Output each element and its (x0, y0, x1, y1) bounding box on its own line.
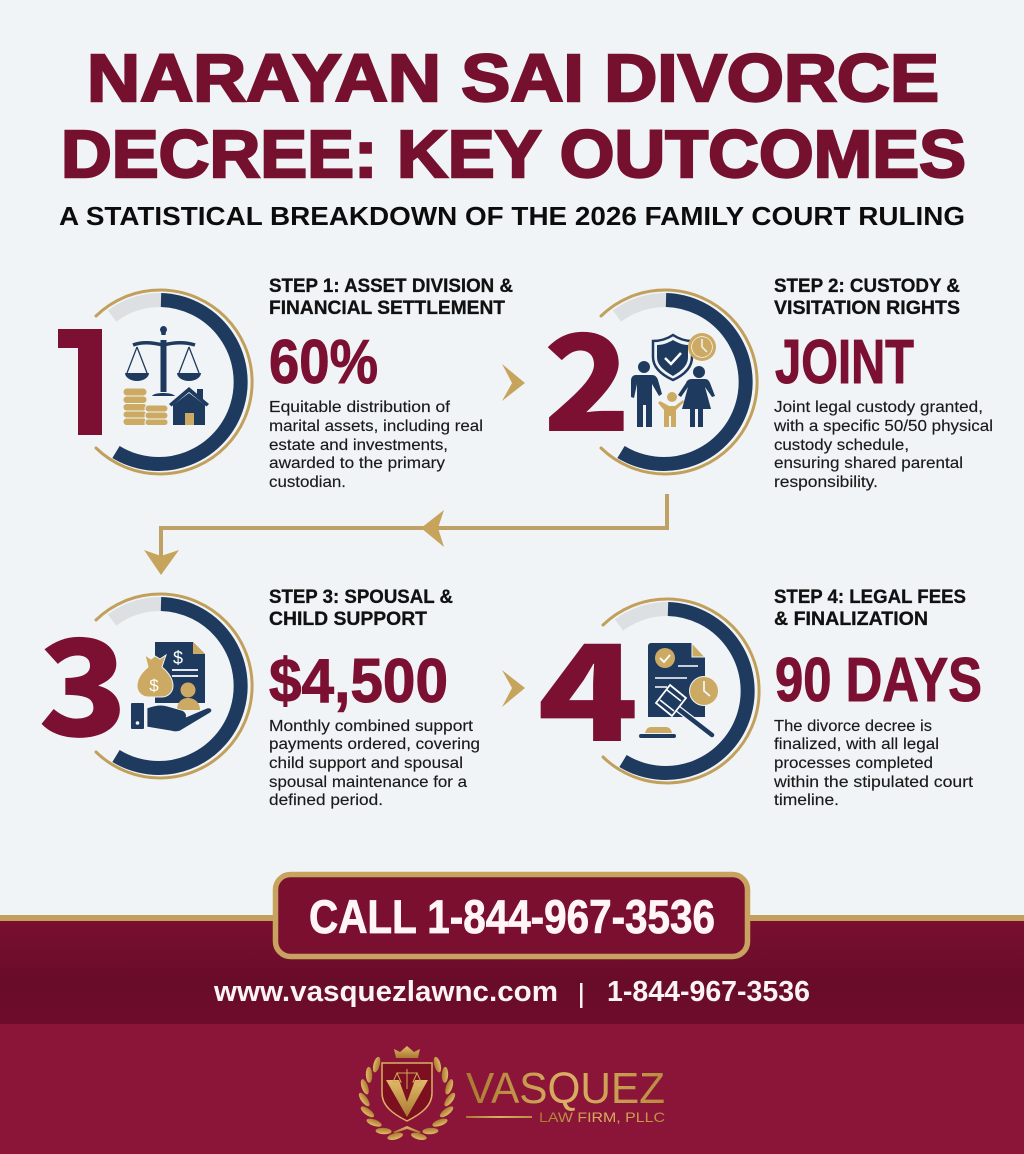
footer logo band (0, 1024, 1024, 1154)
step 4 description: processes completed (774, 755, 933, 772)
statistic: $4,500: $4,500 (269, 647, 448, 716)
statistic: JOINT: JOINT (775, 328, 914, 397)
progress ring 4 (603, 599, 759, 783)
arrow: step 3 to step 4 (502, 670, 525, 707)
arrow: step 1 to step 2 (502, 364, 525, 401)
logo wordmark: LAW FIRM, PLLC (539, 1109, 665, 1125)
step 1 description (269, 399, 483, 491)
step 3 description: defined period. (269, 792, 383, 809)
step 1 description: Equitable distribution of (269, 399, 451, 416)
panel: step 3 (38, 581, 480, 809)
numeral 2: 2 (543, 276, 631, 470)
icon: scales, coins and house (123, 326, 209, 426)
logo: laurel crest (357, 1046, 457, 1141)
step 2 description (773, 399, 993, 491)
website and phone line: 1-844-967-3536 (607, 976, 810, 1008)
arrow: step 2 to step 3 connector (144, 494, 667, 575)
step 2 heading (774, 276, 960, 319)
laurel wreath (357, 1056, 457, 1141)
step 4 description: The divorce decree is (774, 718, 932, 735)
icon: money bag, document and hand: $ (149, 676, 159, 695)
step 3 heading: STEP 3: SPOUSAL & (269, 587, 453, 608)
step 3 description: Monthly combined support (269, 718, 474, 735)
step 2 description: with a specific 50/50 physical (773, 418, 993, 435)
website and phone line: www.vasquezlawnc.com (213, 976, 558, 1008)
step 1 description: estate and investments, (269, 437, 448, 454)
numeral 4: 4 (537, 586, 639, 780)
step 2 description: Joint legal custody granted, (774, 399, 983, 416)
step 3 description (269, 718, 480, 809)
step 1 heading: FINANCIAL SETTLEMENT (269, 298, 505, 319)
progress ring 1 (96, 290, 252, 474)
step 1 heading (269, 276, 513, 319)
step 4 heading: & FINALIZATION (774, 609, 928, 630)
step 3 heading (269, 587, 453, 630)
statistic: 90 DAYS: 90 DAYS (775, 646, 982, 715)
step 3 description: spousal maintenance for a (269, 774, 467, 791)
icon: family, shield and clock (631, 333, 716, 427)
step 1 description: awarded to the primary (269, 455, 445, 472)
icon: document, clock and gavel (639, 643, 718, 738)
crown (394, 1046, 420, 1058)
title: DECREE: KEY OUTCOMES (61, 117, 966, 192)
step 1 description: custodian. (269, 474, 346, 491)
step 4 description: within the stipulated court (773, 774, 974, 791)
step 1 heading: STEP 1: ASSET DIVISION & (269, 276, 513, 297)
title: NARAYAN SAI DIVORCE (87, 41, 939, 116)
panel: step 4 (537, 586, 982, 809)
panel: step 2 (543, 276, 993, 491)
call button (276, 874, 748, 956)
icon: money bag, document and hand: $ (173, 648, 183, 668)
website and phone line (213, 976, 810, 1008)
call button: CALL 1-844-967-3536 (309, 890, 715, 943)
logo wordmark: VASQUEZ (466, 1064, 665, 1113)
subtitle: A STATISTICAL BREAKDOWN OF THE 2026 FAMILY COURT RULING (59, 201, 965, 231)
shield with V (382, 1063, 432, 1121)
step 1 description: marital assets, including real (269, 418, 483, 435)
step 2 description: ensuring shared parental (774, 455, 963, 472)
step 2 heading: VISITATION RIGHTS (774, 298, 960, 319)
step 4 heading (774, 587, 966, 630)
step 4 description: timeline. (774, 792, 839, 809)
panel: step 1 (42, 276, 513, 491)
step 3 heading: CHILD SUPPORT (269, 609, 427, 630)
statistic: 60%: 60% (269, 328, 378, 397)
icon: money bag, document and hand (131, 642, 212, 732)
footer contact band (0, 915, 1024, 1024)
step 4 heading: STEP 4: LEGAL FEES (774, 587, 966, 608)
numeral 1: 1 (42, 299, 125, 467)
progress ring 2 (601, 290, 757, 474)
step 3 description: child support and spousal (269, 755, 463, 772)
step 3 description: payments ordered, covering (269, 736, 480, 753)
step 2 description: responsibility. (774, 474, 878, 491)
numeral 3: 3 (38, 581, 128, 775)
step 4 description: finalized, with all legal (774, 736, 939, 753)
step 2 description: custody schedule, (774, 437, 909, 454)
progress ring 3 (96, 594, 252, 778)
title (61, 41, 966, 192)
step 4 description (773, 718, 974, 809)
step 2 heading: STEP 2: CUSTODY & (774, 276, 960, 297)
